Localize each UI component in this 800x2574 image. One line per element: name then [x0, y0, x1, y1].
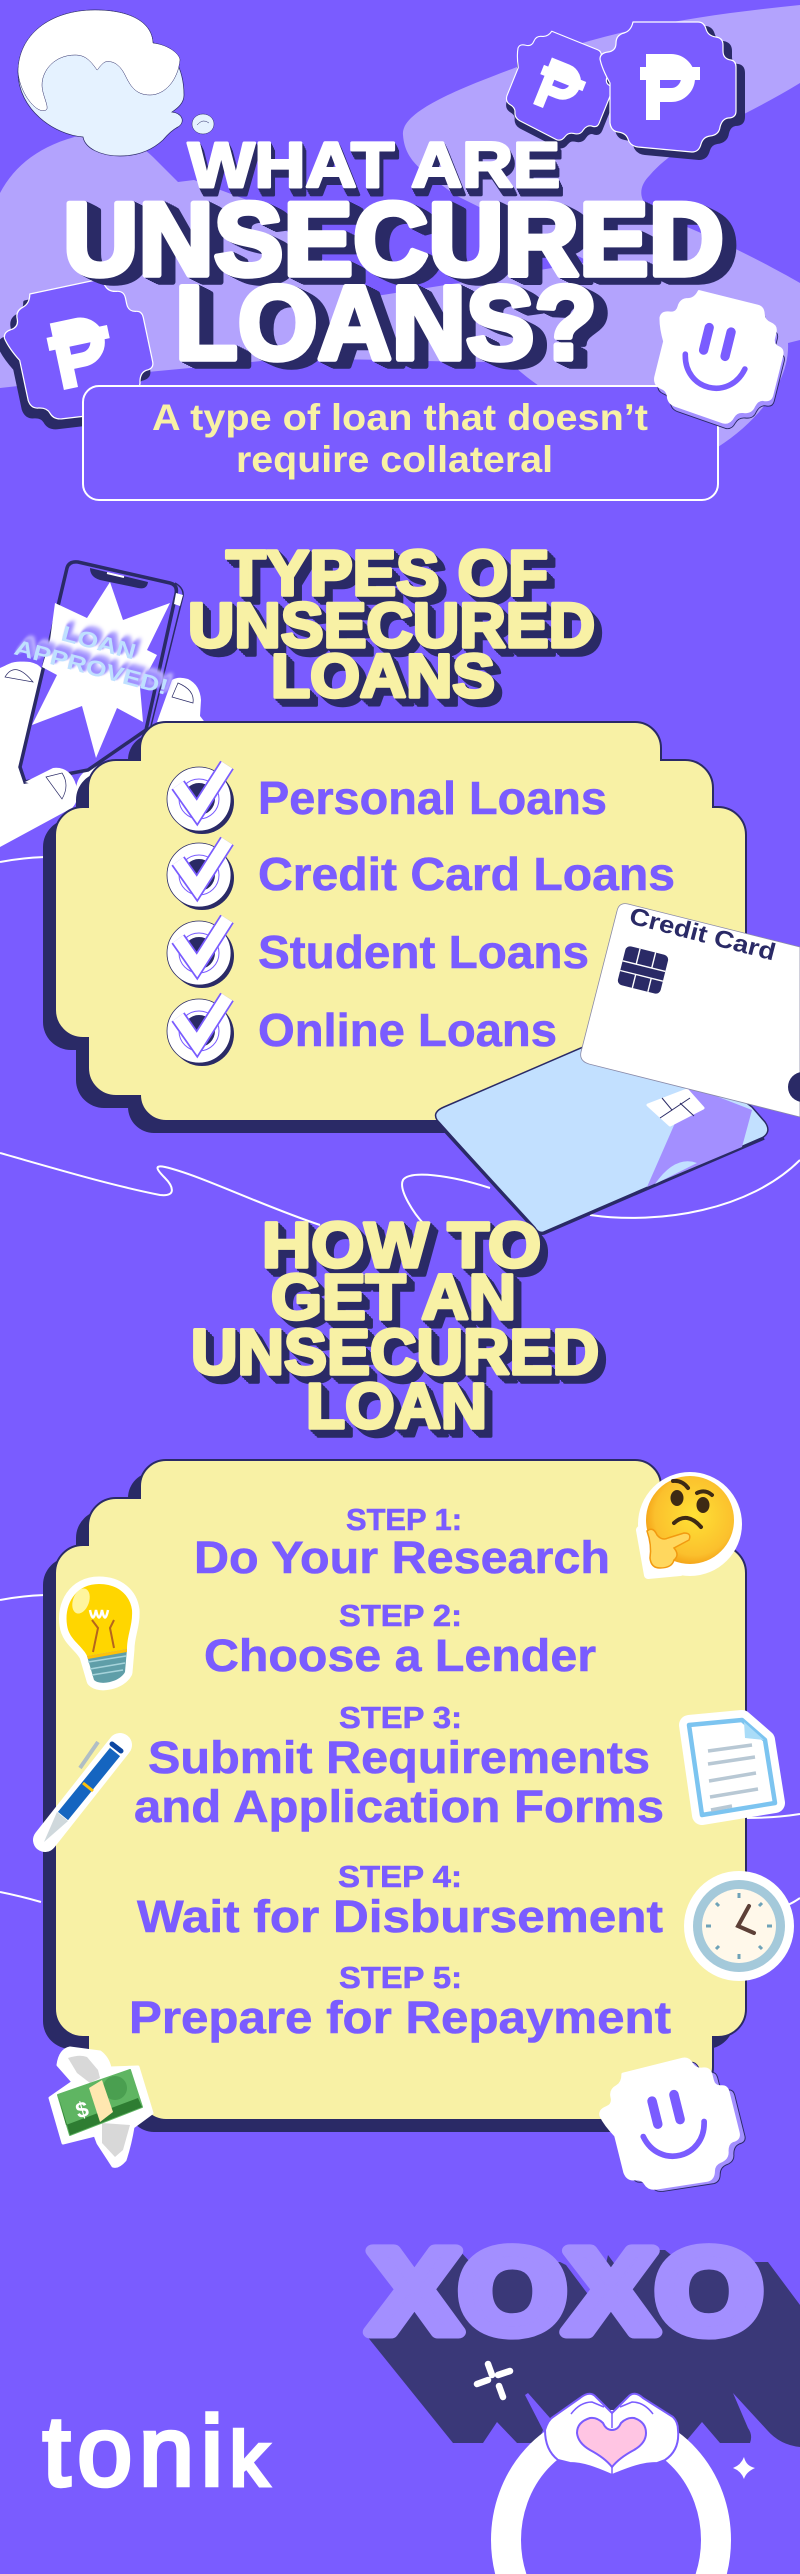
icon: smiley coin bottom [592, 2049, 754, 2206]
checklist item: personal loans: Personal Loans [258, 772, 607, 824]
decorative lines [0, 857, 800, 1908]
title line: what are: WHAT ARE [188, 129, 560, 201]
hand [0, 662, 77, 847]
subtitle box: require collateral [236, 439, 553, 480]
icon: peso coin large [600, 22, 743, 158]
background swash [0, 5, 800, 447]
icon: thinking face [638, 1472, 742, 1576]
step 2: STEP 2: [339, 1598, 462, 1633]
step 3: and Application Forms [134, 1781, 664, 1832]
step 1: STEP 1: [346, 1502, 462, 1537]
ring arms [506, 2425, 716, 2574]
step 2 [204, 1598, 596, 1681]
checklist item: student loans: Student Loans [258, 926, 589, 978]
icon: thought bubble [18, 10, 214, 156]
step 2: Choose a Lender [204, 1630, 596, 1681]
pink heart [577, 2418, 646, 2467]
heading: how to get an unsecured loan: UNSECURED [191, 1316, 599, 1388]
illustration: xoxo [366, 2226, 800, 2447]
heading: how to get an unsecured loan [191, 1209, 599, 1442]
icon: flying money [50, 2048, 152, 2166]
star burst [32, 582, 170, 758]
heading: types of unsecured loans: UNSECURED [188, 591, 595, 661]
card chip [617, 945, 669, 995]
icon: light bulb [67, 1584, 132, 1683]
subtitle box [83, 386, 718, 500]
icon: white credit card [581, 903, 800, 1117]
loan approved text: LOAN [59, 621, 139, 664]
step 1: Do Your Research [194, 1532, 610, 1583]
loan approved text: APPROVED! [12, 635, 171, 700]
dollar sign: $ [73, 2096, 91, 2123]
title line: loans: LOANS? [175, 265, 597, 382]
icon: clock [684, 1871, 794, 1981]
checklist item: student loans [167, 919, 589, 988]
step 1 [194, 1502, 610, 1583]
illustration: hand holding phone [0, 562, 207, 847]
loan approved text [12, 621, 171, 700]
step 3: STEP 3: [339, 1700, 462, 1735]
xoxo shadow [366, 2250, 800, 2447]
checklist item: online loans: Online Loans [258, 1004, 557, 1056]
icon: small star [733, 2457, 755, 2479]
thumb and fingers [25, 768, 77, 808]
icon: blue credit card [436, 1044, 768, 1233]
step 4: STEP 4: [338, 1859, 462, 1894]
title line: unsecured: UNSECURED [63, 182, 724, 298]
heading: how to get an unsecured loan: LOAN [306, 1370, 487, 1442]
phone body [150, 583, 183, 730]
icon: pen [44, 1742, 121, 1842]
heading: types of unsecured loans: LOANS [271, 642, 495, 710]
panel: types of unsecured loans [43, 722, 746, 1133]
white sticker outline [50, 2048, 152, 2166]
step 4 [137, 1859, 663, 1942]
banknotes [58, 2070, 142, 2135]
icon: smiley coin top [639, 284, 796, 438]
icon: peso coin small [490, 22, 628, 159]
icon: document [689, 1720, 775, 1815]
step 4: Wait for Disbursement [137, 1891, 663, 1942]
checklist item: credit card loans [167, 841, 675, 910]
heading: how to get an unsecured loan: GET AN [271, 1261, 516, 1333]
step 3: Submit Requirements [148, 1732, 650, 1783]
step 5 [129, 1960, 671, 2043]
card label: Credit Card [626, 903, 778, 966]
heading: how to get an unsecured loan: HOW TO [262, 1209, 541, 1281]
heading: types of unsecured loans [188, 537, 595, 710]
subtitle box: A type of loan that doesn’t [152, 397, 648, 438]
checklist item: credit card loans: Credit Card Loans [258, 848, 675, 900]
heading: types of unsecured loans: TYPES OF [226, 537, 548, 609]
step 5: STEP 5: [339, 1960, 462, 1995]
step 3 [134, 1700, 664, 1832]
checklist item: online loans [167, 997, 557, 1066]
title [63, 129, 724, 382]
logo: tonik: tonik [43, 2396, 269, 2506]
illustration: heart hands [506, 2394, 716, 2574]
panel: steps [43, 1460, 746, 2132]
hands [545, 2394, 678, 2475]
icon: peso coin left [0, 272, 163, 440]
step 5: Prepare for Repayment [129, 1992, 671, 2043]
wings [68, 2056, 100, 2083]
icon: sparkle [477, 2364, 510, 2397]
xoxo text: XOXO [369, 2226, 762, 2358]
checklist item: personal loans [167, 765, 607, 834]
